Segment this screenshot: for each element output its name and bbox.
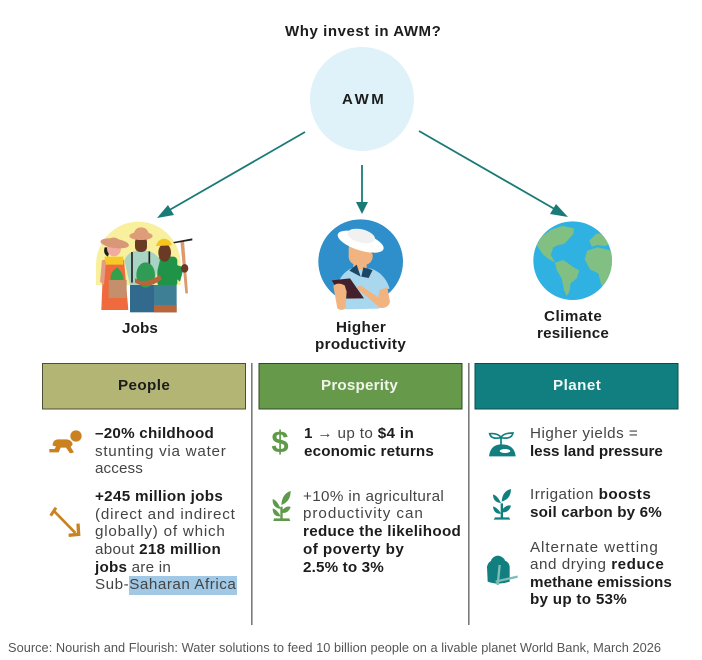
worker with watermelon bbox=[124, 227, 162, 312]
heading: prosperity bbox=[259, 364, 462, 409]
highlight: Saharan Africa bbox=[129, 576, 237, 595]
text: land pressure: less land pressure bbox=[530, 443, 663, 460]
text: jobs bbox=[94, 488, 236, 593]
text: soil carbon: soil carbon by 6% bbox=[530, 504, 662, 521]
text: methane emissions: Alternate wetting bbox=[530, 539, 658, 556]
text: jobs: +245 million jobs bbox=[95, 488, 223, 505]
text: methane emissions bbox=[530, 539, 672, 608]
label: climate resilience bbox=[537, 308, 609, 342]
text: poverty reduction: productivity can bbox=[303, 505, 423, 522]
divider: left bbox=[251, 363, 253, 625]
text: jobs: (direct and indirect bbox=[95, 506, 236, 523]
heading: planet bbox=[475, 364, 678, 409]
AWM circle bbox=[310, 47, 414, 151]
icon: seedling bbox=[273, 491, 291, 521]
text: poverty reduction: of poverty by bbox=[303, 541, 404, 558]
label: higher productivity bbox=[315, 319, 406, 353]
panel: people bbox=[42, 364, 246, 595]
text: childhood stunting: stunting via water bbox=[95, 443, 226, 460]
text: methane emissions: and drying reduce bbox=[530, 556, 664, 573]
worker with hoe bbox=[154, 238, 192, 312]
icon: farmer with tablet bbox=[318, 219, 403, 310]
text: poverty reduction: 2.5% to 3% bbox=[303, 559, 384, 576]
heading: planet: Planet bbox=[553, 377, 601, 394]
label: climate resilience: Climate bbox=[544, 308, 602, 325]
icon: dollar sign: $ bbox=[271, 424, 289, 459]
panel: planet bbox=[475, 364, 678, 608]
text: childhood stunting: access bbox=[95, 460, 143, 477]
icon: leafy plant bbox=[493, 489, 511, 520]
icon: globe bbox=[533, 221, 613, 300]
text: land pressure: Higher yields = bbox=[530, 425, 638, 442]
text: poverty reduction: reduce the likelihood bbox=[303, 523, 461, 540]
text: soil carbon: Irrigation boosts bbox=[530, 486, 651, 503]
text: poverty reduction: +10% in agricultural bbox=[303, 488, 444, 505]
text: methane emissions: by up to 53% bbox=[530, 591, 627, 608]
text: economic returns bbox=[304, 425, 434, 460]
label: higher productivity: productivity bbox=[315, 336, 406, 353]
text: childhood stunting: –20% childhood bbox=[95, 425, 214, 442]
icon: sprout on soil bbox=[489, 433, 516, 456]
text: soil carbon bbox=[530, 486, 662, 521]
label: jobs: Jobs bbox=[122, 320, 158, 337]
source note: Source: Nourish and Flourish: Water solutions to feed 10 billion people on a livable planet World Bank, March 2026 bbox=[8, 640, 661, 655]
text: jobs: Sub-Saharan Africa bbox=[95, 576, 236, 593]
text: childhood stunting bbox=[95, 425, 226, 477]
heading: prosperity: Prosperity bbox=[321, 377, 398, 394]
text: jobs: about 218 million bbox=[95, 541, 221, 558]
text: jobs: jobs are in bbox=[94, 559, 171, 576]
text: poverty reduction bbox=[303, 488, 461, 576]
icon: hoe bbox=[51, 508, 79, 535]
heading: people bbox=[42, 364, 246, 409]
text: methane emissions: methane emissions bbox=[530, 574, 672, 591]
text: economic returns: economic returns bbox=[304, 443, 434, 460]
title: Why invest in AWM? bbox=[285, 23, 441, 40]
label: climate resilience: resilience bbox=[537, 325, 609, 342]
arrow: AWM to higher productivity bbox=[356, 165, 368, 214]
AWM circle: AWM bbox=[342, 91, 384, 108]
icon: crawling child bbox=[49, 430, 82, 453]
label: higher productivity: Higher bbox=[336, 319, 386, 336]
heading: people: People bbox=[118, 377, 170, 394]
icon: three farm workers bbox=[96, 222, 192, 312]
text: land pressure bbox=[530, 425, 663, 460]
panel: prosperity bbox=[259, 364, 462, 576]
icon: sack of grain bbox=[487, 556, 518, 585]
divider: right bbox=[468, 363, 470, 625]
text: jobs: globally) of which bbox=[95, 523, 225, 540]
worker with apron bbox=[100, 237, 130, 310]
arrow: AWM to jobs bbox=[157, 132, 305, 218]
text: economic returns: 1 → up to $4 in bbox=[304, 425, 414, 442]
arrow: AWM to climate resilience bbox=[419, 131, 568, 217]
